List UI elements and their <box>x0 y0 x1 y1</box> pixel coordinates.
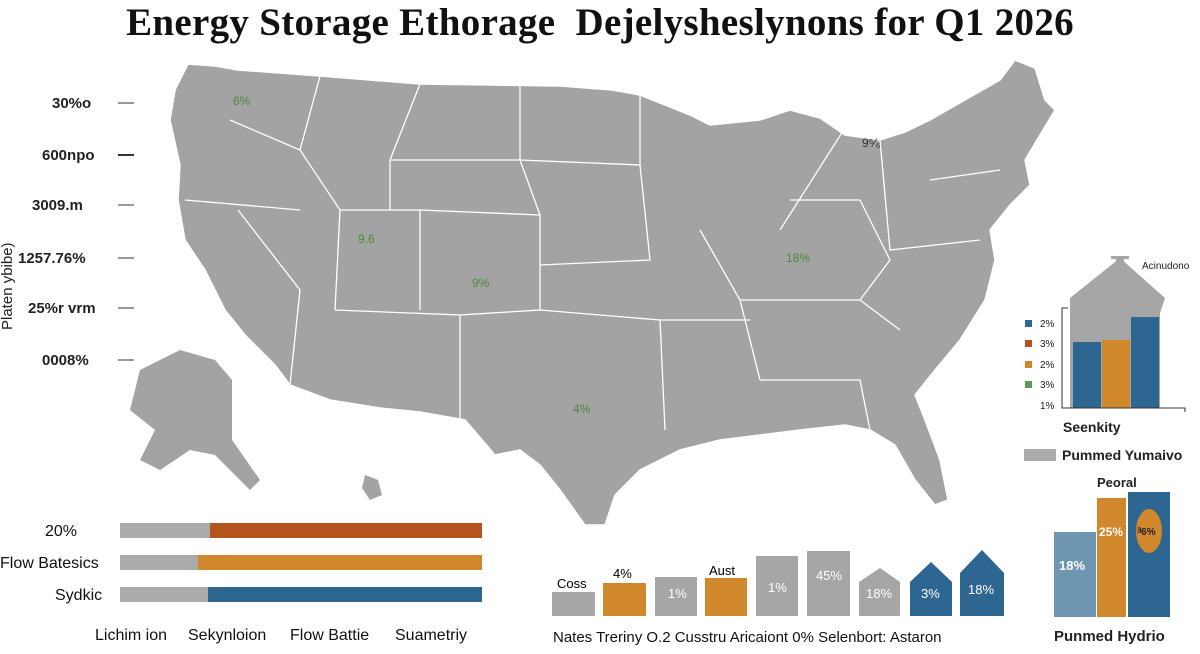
right house chart: 3% <box>1040 380 1055 391</box>
map of US: 9⁵⁄₆ <box>862 136 881 150</box>
left axis: 0008% <box>42 352 89 369</box>
bottom-left bars: Lichim ion <box>95 627 167 644</box>
map labels <box>233 94 810 416</box>
right house chart: Peoral <box>1097 475 1137 490</box>
right house chart: 1% <box>1040 401 1055 412</box>
bottom middle chart <box>552 550 1004 646</box>
bottom middle chart: Aust <box>709 563 735 578</box>
bottom-left bars: Flow Batesics <box>0 555 99 572</box>
right house chart: 18% <box>1059 558 1085 573</box>
map labels: 18% <box>786 251 810 265</box>
bottom-left bars: 20% <box>45 523 77 540</box>
bottom middle chart: 45% <box>816 568 842 583</box>
right house chart: Punmed Hydrio <box>1054 628 1165 645</box>
left axis: 600npo <box>42 147 95 164</box>
bottom middle chart: 1% <box>768 580 787 595</box>
bottom-left bars: Sekynloion <box>188 627 266 644</box>
right house chart: 2% <box>1040 319 1055 330</box>
bottom middle chart: 18% <box>968 582 994 597</box>
bottom middle chart: Coss <box>557 576 587 591</box>
right house chart: Pummed Yumaivo <box>1062 447 1182 463</box>
left axis: 3009.m <box>32 197 83 214</box>
bottom-left bars <box>0 523 482 644</box>
bottom-left bars: Sydkic <box>55 587 102 604</box>
bottom middle chart: 1% <box>668 586 687 601</box>
alaska <box>130 350 260 490</box>
bottom middle chart: 3% <box>921 586 940 601</box>
right house chart: 25% <box>1099 525 1123 539</box>
left axis: 25%r vrm <box>28 300 96 317</box>
map labels: 6% <box>233 94 251 108</box>
map labels: 4% <box>573 402 591 416</box>
title: Energy Storage Ethorage Dejelysheslynons for Q1 2026 <box>126 1 1074 44</box>
left axis: 1257.76% <box>18 250 86 267</box>
hawaii <box>362 475 382 500</box>
bottom middle chart: Nates Treriny O.2 Cusstru Aricaiont 0% Selenbort: Astaron <box>553 629 942 646</box>
bottom-left bars: Suametriy <box>395 627 467 644</box>
map labels: 9% <box>472 276 490 290</box>
left axis: 30%o <box>52 95 91 112</box>
right house chart: 2% <box>1040 360 1055 371</box>
bottom middle chart: 18% <box>866 586 892 601</box>
bottom middle chart: 4% <box>613 566 632 581</box>
right house chart: ᴲ6% <box>1137 527 1156 538</box>
right house chart <box>1024 256 1190 645</box>
right house chart: 3% <box>1040 339 1055 350</box>
bottom-left bars: Flow Battie <box>290 627 369 644</box>
right house chart: Acinudono <box>1142 261 1190 272</box>
map labels: 9.6 <box>358 232 375 246</box>
left axis <box>18 95 96 369</box>
right house chart: Seenkity <box>1063 419 1121 435</box>
